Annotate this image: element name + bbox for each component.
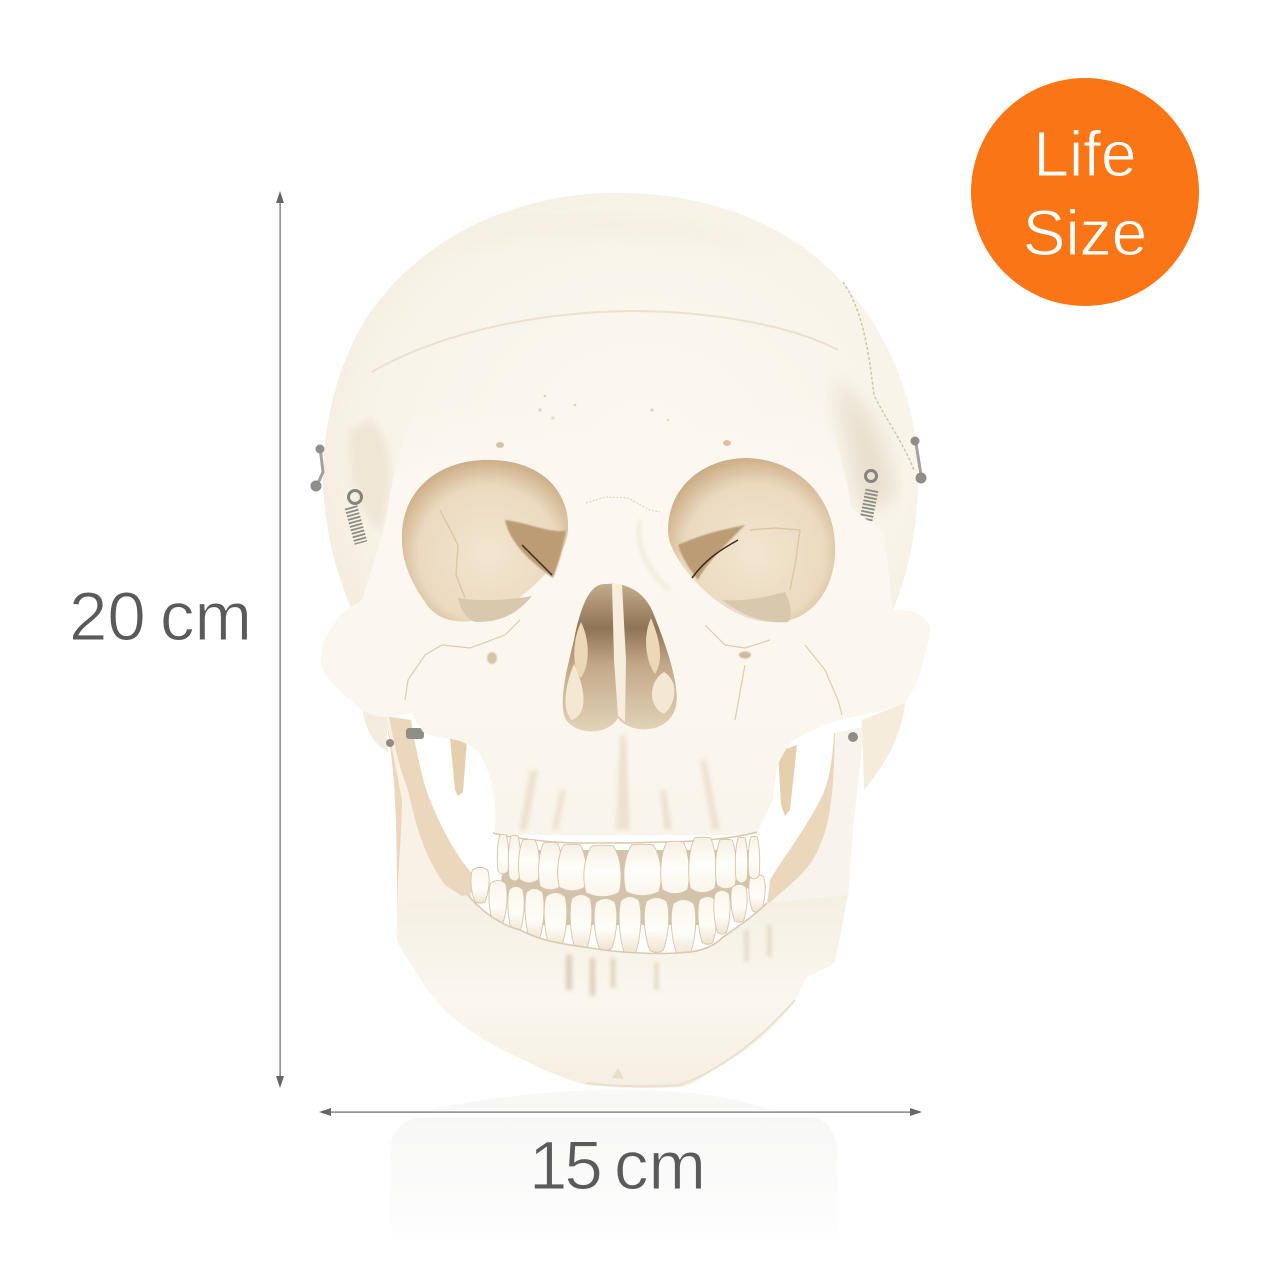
infraorbital foramen right (739, 652, 751, 658)
left orbit floor (458, 596, 532, 622)
left temple shading (349, 420, 391, 530)
height label: 20 (69, 578, 146, 655)
chin lower rim (587, 1000, 795, 1086)
jaw joint bolts (386, 728, 858, 747)
mental root ridges (566, 925, 771, 996)
horizontal dimension arrow (319, 1108, 922, 1116)
infraorbital foramen left (487, 652, 497, 664)
sagittal suture (843, 282, 914, 470)
gum line shadow (468, 895, 767, 953)
teeth backing (500, 850, 755, 925)
right ramus outer cream (767, 727, 864, 905)
right orbit suture (750, 528, 800, 590)
width label: 15 (529, 1127, 600, 1204)
nasal septum (612, 584, 626, 722)
left ramus inner tan (385, 716, 475, 905)
vertical dimension arrow (276, 191, 284, 1088)
mandible body (397, 895, 848, 1088)
upper face and maxilla (321, 400, 930, 835)
lower teeth (471, 867, 765, 956)
upper vault shade (440, 217, 790, 260)
supraorbital notch left (496, 442, 504, 448)
left upper concha (574, 622, 588, 678)
maxilla rim (493, 832, 757, 843)
life size badge: Life (1033, 118, 1137, 190)
life size badge: Size (1023, 197, 1147, 269)
chin notch (612, 1068, 624, 1079)
right orbit fissure (678, 525, 745, 580)
midface ridge shading (519, 735, 720, 830)
right ramus inner tan (767, 730, 860, 905)
coronal suture ridge (372, 311, 838, 372)
left orbit (402, 460, 568, 622)
hardware: right screws and spring (866, 436, 926, 520)
nasal cavity (563, 584, 677, 731)
right orbit floor (722, 592, 791, 622)
cranium (323, 193, 918, 700)
pterygoid spikes (450, 738, 797, 816)
upper teeth (497, 834, 760, 897)
right concha (652, 672, 674, 714)
left ramus outer cream (385, 716, 468, 910)
width label: cm (614, 1127, 706, 1204)
brow pores (538, 395, 669, 421)
right temple shading (832, 380, 895, 510)
mandible rami (385, 716, 864, 910)
life size badge (971, 78, 1199, 306)
skull reflection (390, 1090, 838, 1242)
zygomatic sutures (405, 620, 842, 720)
left concha (565, 664, 584, 720)
height label: cm (160, 578, 252, 655)
supraorbital notch right (723, 440, 731, 446)
right orbit (668, 458, 835, 622)
back of skull: right mastoid (862, 703, 905, 790)
hardware: left screws and spring (310, 444, 362, 543)
left orbit suture (440, 510, 465, 598)
right upper concha (646, 618, 660, 674)
left orbit fissure (505, 520, 566, 578)
nasal bones (586, 497, 670, 590)
back of skull: left mastoid (362, 706, 388, 752)
